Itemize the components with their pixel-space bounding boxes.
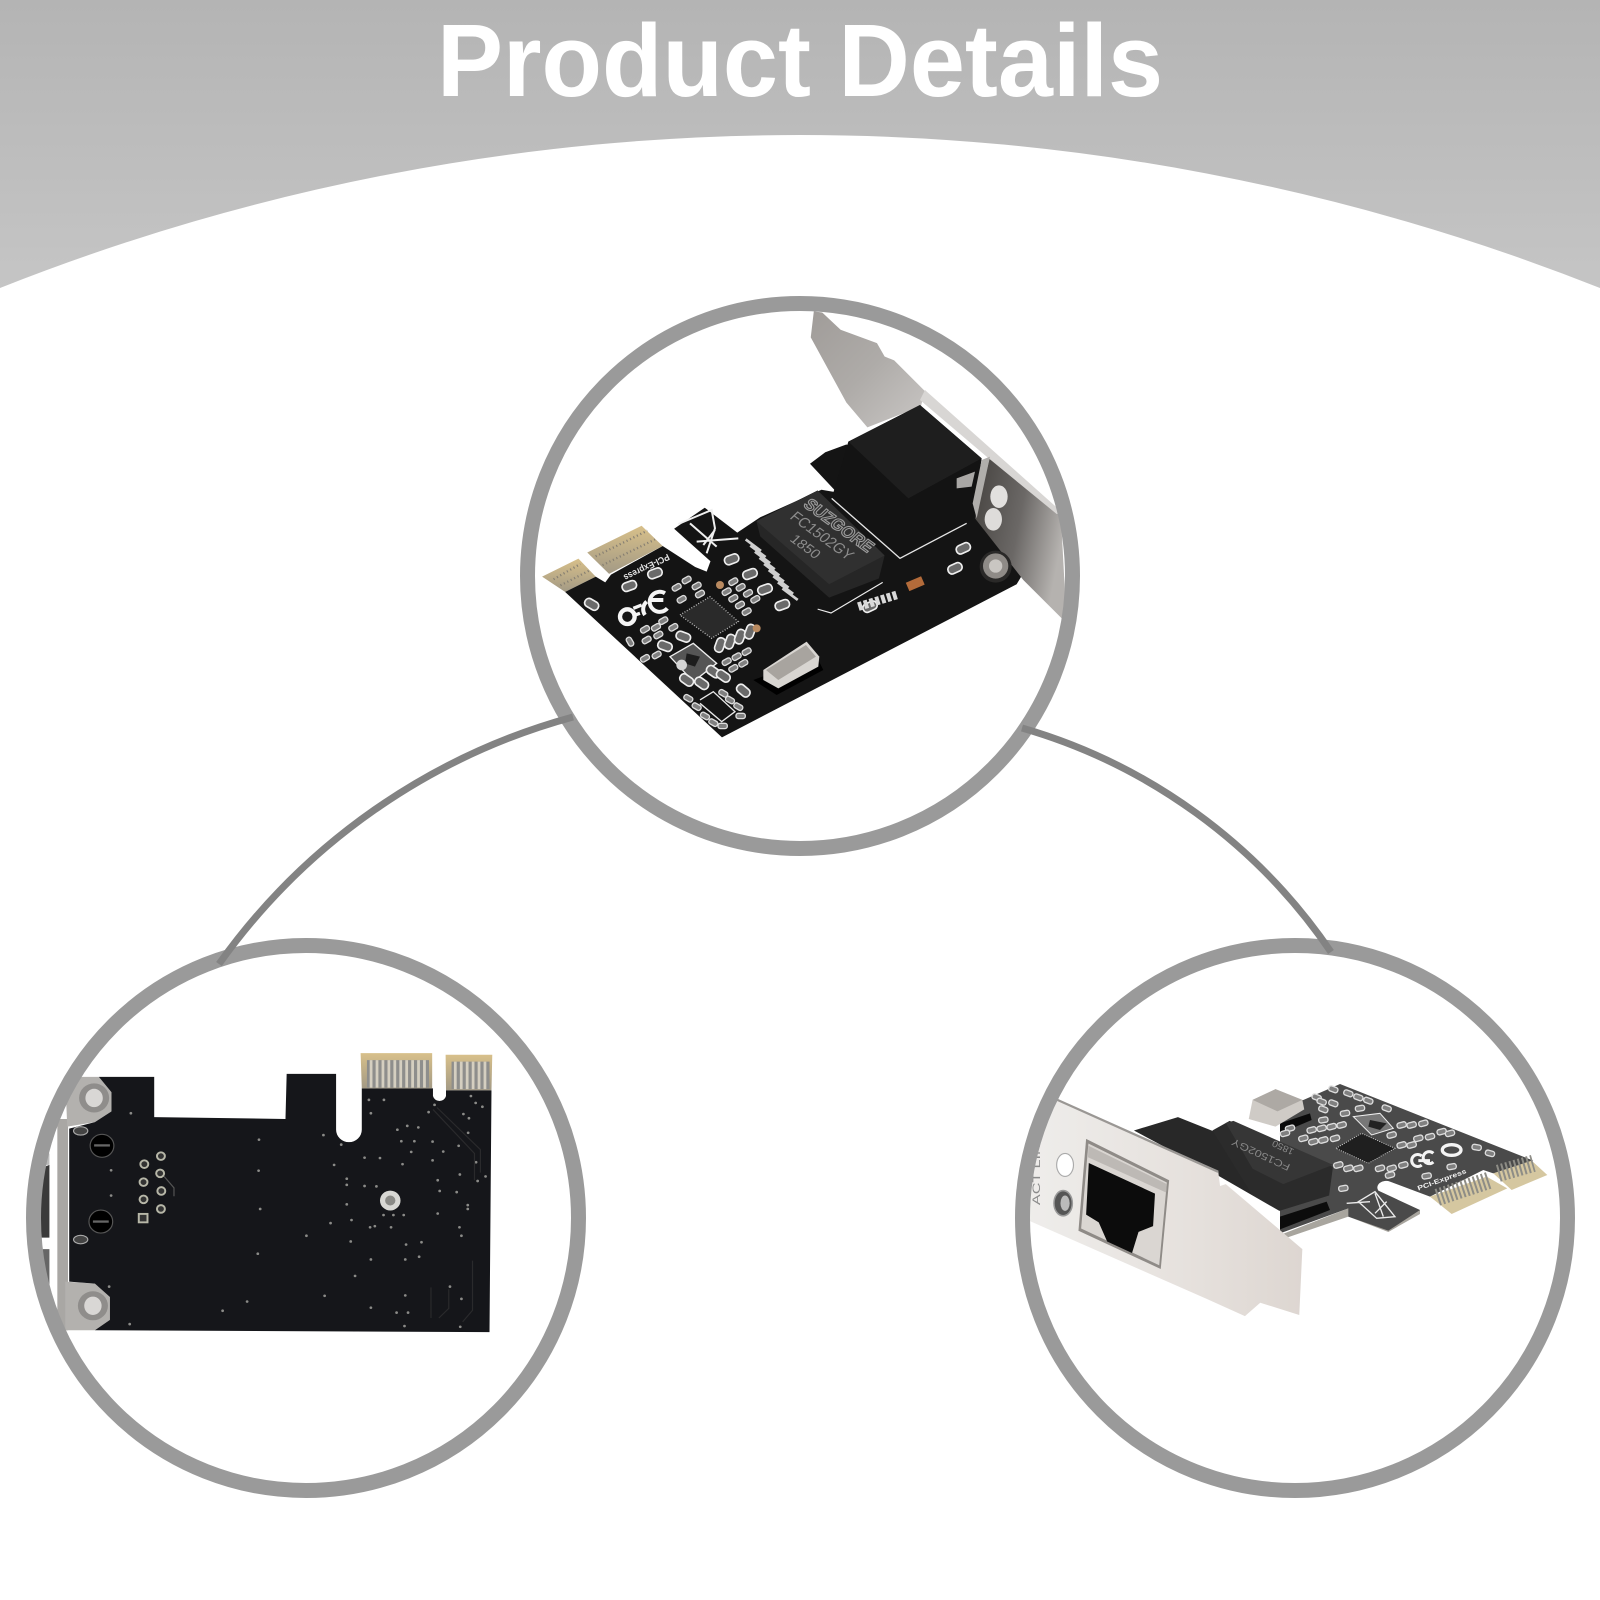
bracket plate: [1015, 1073, 1302, 1316]
through holes: [90, 1134, 114, 1157]
crystal: [1249, 1089, 1304, 1127]
circuit board: [69, 1074, 491, 1332]
circuit board: [1280, 1084, 1547, 1240]
vias: [109, 1096, 486, 1327]
regulator: [1353, 1113, 1393, 1135]
transformer: [756, 490, 885, 598]
outline near transformer: [818, 582, 883, 613]
bracket holes: [990, 485, 1008, 508]
crystal shadow: [1280, 1113, 1312, 1133]
panel: bottom right detail circle: [1015, 946, 1568, 1490]
panel: top detail circle: [528, 304, 1072, 848]
connector arc: top to left: [219, 717, 573, 964]
PCI-Express label: PCI-Express: [1417, 1168, 1468, 1193]
screw: [980, 551, 1012, 583]
PCI-Express label: PCI-Express: [622, 552, 671, 583]
connector arc: top to right: [1022, 728, 1331, 952]
SUZGORE logo: SUZGORE: [799, 495, 878, 556]
ring: [1022, 946, 1568, 1490]
black gap: [1280, 1202, 1330, 1229]
regulator outline: [700, 692, 735, 722]
photo: angled PCB with RJ45: [542, 311, 1067, 737]
bracket plate: [975, 457, 1067, 623]
brown parts: [716, 581, 724, 589]
traces: [431, 1108, 480, 1322]
board detail: left half: [583, 510, 823, 729]
ring: [34, 946, 578, 1490]
FC1502GY marking: FC1502GY: [786, 509, 857, 564]
brown capacitor: [908, 580, 923, 587]
recycling tab icon: [1347, 1192, 1395, 1218]
transformer: [1212, 1121, 1333, 1211]
gold fingers: [361, 1053, 432, 1088]
circuit board: [565, 445, 1022, 737]
screws: [79, 1083, 109, 1112]
small pads: [74, 1127, 88, 1135]
main chip: [680, 597, 738, 638]
crystal shadow: [754, 662, 823, 695]
RJ45 opening: [1086, 1163, 1155, 1253]
1850 marking: 1850: [787, 531, 825, 562]
pads near bracket: [955, 541, 972, 555]
crystal: [763, 642, 819, 688]
ACT LINK label: ACT LINK: [1031, 1132, 1043, 1205]
FC1502GY marking: FC1502GY: [1230, 1135, 1292, 1172]
RJ45 connector: [834, 405, 982, 510]
surface mount pads: [584, 598, 600, 612]
gold fingers: [1430, 1177, 1507, 1214]
bracket top strip: [920, 390, 1063, 514]
connector pins: [139, 1152, 165, 1222]
panel: bottom left detail circle: [34, 946, 578, 1490]
regulator block: [670, 643, 717, 682]
photo: PCB reverse side: [40, 1053, 492, 1332]
1850 marking: 1850: [1270, 1138, 1296, 1157]
main chip: [1336, 1133, 1395, 1163]
CE logo: [650, 592, 667, 612]
LED holes: [1057, 1153, 1073, 1176]
port frame: [1078, 1139, 1169, 1269]
board detail: [1280, 1085, 1495, 1218]
connector flange: [973, 457, 990, 518]
recycling tab icon: [678, 510, 738, 553]
RJ45 side view: [41, 1165, 50, 1238]
surface mount pads: [1328, 1085, 1339, 1093]
rear connector block: [1134, 1117, 1254, 1196]
title: Product Details: [437, 3, 1163, 118]
gold fingers: [542, 559, 596, 592]
bracket corners: [65, 1077, 112, 1127]
CE logo: [1412, 1152, 1433, 1166]
photo: bracket with RJ45 port: [1015, 1073, 1547, 1316]
metal bracket tab: [811, 311, 925, 427]
bracket plate: [57, 1119, 68, 1330]
ring: [528, 304, 1072, 848]
connector and bracket detail: [832, 390, 1067, 623]
header band: [0, 0, 1600, 288]
centre mounting hole: [380, 1191, 401, 1210]
transformer pins: [746, 539, 798, 600]
